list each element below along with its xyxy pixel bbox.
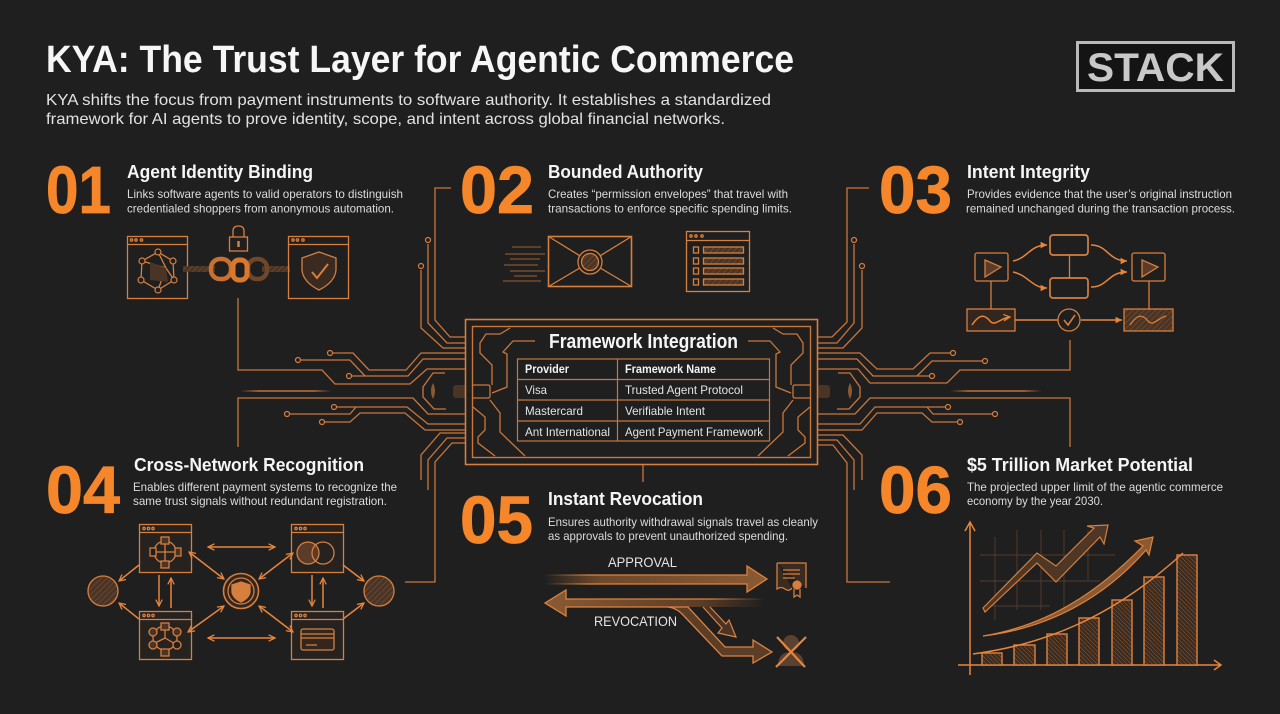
description 05 [548,515,818,543]
panel 05: instant revocation [460,483,818,667]
icon: sealed envelope [503,236,632,286]
panel 02: bounded authority [460,153,792,292]
arrow: revocation [545,590,772,663]
circuit traces: left [238,188,473,582]
table: providers and frameworks: Provider [525,362,569,376]
arrow: rising curve [983,537,1153,636]
description 01: credentialed shoppers from anonymous automation. [127,202,394,216]
description 04 [133,480,397,508]
heading 06: $5 Trillion Market Potential [967,455,1193,475]
number 05: 05 [460,483,533,558]
heading 04: Cross-Network Recognition [134,455,364,475]
number 06: 06 [879,453,952,528]
label: approval: APPROVAL [608,554,677,570]
label: revocation: REVOCATION [594,613,677,629]
number 01: 01 [46,153,111,228]
icon: certificate [777,563,806,597]
description 03: remained unchanged during the transaction process. [966,202,1235,216]
table: providers and frameworks: Ant International [525,425,610,439]
description 04: Enables different payment systems to recognize the [133,480,397,494]
description 02: Creates “permission envelopes” that travel with [548,187,788,201]
panel heading: Framework Integration [549,331,738,353]
icon: shield window [288,236,348,298]
title: KYA: The Trust Layer for Agentic Commerce [46,39,794,81]
panel 01: agent identity binding [46,153,403,298]
description 02: transactions to enforce specific spending limits. [548,202,792,216]
table: providers and frameworks: Agent Payment Framework [625,425,764,439]
network diagram [88,524,394,660]
table: providers and frameworks: Visa [525,383,547,397]
number 04: 04 [46,453,120,528]
icon: chain [183,259,290,280]
panel 06: market potential [879,453,1223,675]
intro text: KYA shifts the focus from payment instruments to software authority. It establishes a standardized [46,92,771,109]
arrow: approval [545,566,767,592]
arrow: zigzag growth [983,525,1108,612]
description 06: The projected upper limit of the agentic commerce [967,480,1223,494]
growth chart [958,522,1221,675]
table: providers and frameworks: Framework Name [625,362,716,376]
heading 02: Bounded Authority [548,162,703,182]
description 06: economy by the year 2030. [967,494,1103,508]
description 01 [127,187,403,216]
table: providers and frameworks: Mastercard [525,404,583,418]
heading 05: Instant Revocation [548,489,703,509]
connector: center to revocation [642,465,644,482]
description 02 [548,187,792,216]
intro text [46,92,771,128]
icon: network window [128,236,188,298]
icon: checklist window [686,232,750,292]
table: providers and frameworks: Trusted Agent Protocol [625,383,743,397]
logo: STACK: STACK [1087,46,1224,90]
description 01: Links software agents to valid operators to distinguish [127,187,403,201]
circuit traces: right [810,188,1070,582]
description 05: Ensures authority withdrawal signals travel as cleanly [548,515,818,529]
icon: padlock [230,226,248,251]
table: providers and frameworks [518,359,770,441]
panel 04: cross-network recognition [46,453,397,660]
intro text: framework for AI agents to prove identity, scope, and intent across global financial networks. [46,111,725,128]
description 05: as approvals to prevent unauthorized spending. [548,529,788,543]
heading 01: Agent Identity Binding [127,162,313,182]
icon: revoked person [776,635,806,667]
number 02: 02 [460,153,534,228]
description 03: Provides evidence that the user’s original instruction [967,187,1232,201]
table: providers and frameworks: Verifiable Intent [625,404,706,418]
panel: framework integration [466,320,818,464]
number 03: 03 [879,153,952,228]
description 06 [967,480,1223,508]
description 04: same trust signals without redundant registration. [133,494,387,508]
flow diagram [967,235,1173,331]
description 03 [966,187,1235,216]
heading 03: Intent Integrity [967,162,1090,182]
panel 03: intent integrity [879,153,1235,331]
